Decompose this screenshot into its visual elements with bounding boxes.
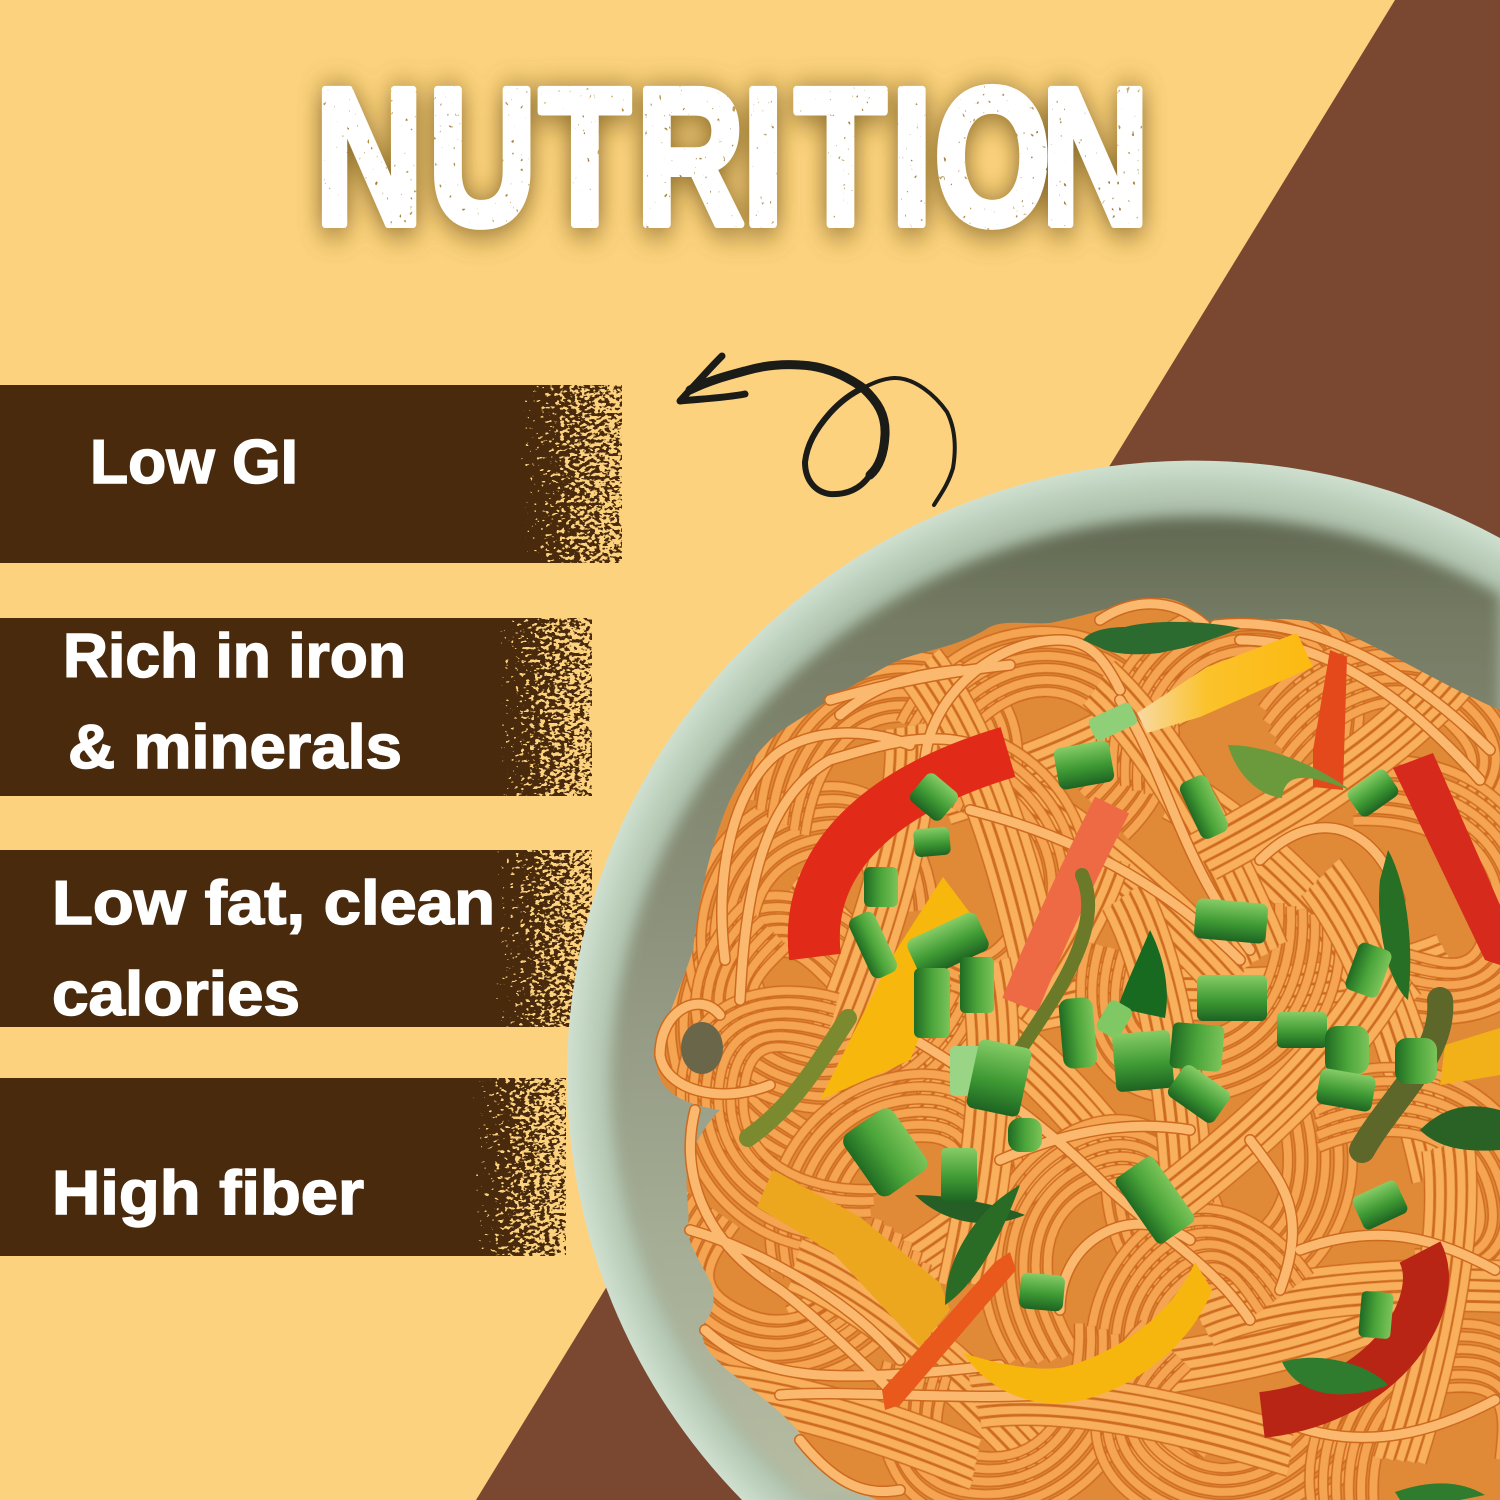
bowl rim: [567, 461, 1500, 1500]
label: Low GI: Low GI: [90, 428, 298, 497]
diagonal brown panel: [476, 0, 1500, 1500]
gap in left noodle loop: [681, 1022, 723, 1074]
noodles: [640, 590, 1500, 1500]
bowl interior: [612, 517, 1500, 1500]
label: and minerals: & minerals: [68, 713, 402, 782]
bar: Low fat, clean calories: [0, 850, 592, 1029]
label: Low fat, clean: Low fat, clean: [52, 869, 495, 938]
bar: Low GI: [0, 385, 622, 563]
loose foreground strands: [660, 604, 1495, 1492]
bowl of noodles: [567, 461, 1500, 1500]
dark leaves: [915, 622, 1500, 1500]
label: Rich in iron: Rich in iron: [63, 622, 406, 691]
green onion pieces: [839, 701, 1437, 1339]
yellow peppers: [757, 633, 1500, 1403]
green chili peppers: [748, 875, 1440, 1150]
title: NUTRITION: [315, 51, 1149, 269]
bar: High fiber: [0, 1078, 566, 1256]
label: calories: calories: [52, 960, 300, 1029]
red and orange peppers: [814, 650, 1500, 1415]
title: NUTRITION: [315, 47, 1149, 265]
arrow: [680, 356, 955, 505]
bar: Rich in iron and minerals: [0, 618, 592, 796]
label: High fiber: High fiber: [52, 1159, 364, 1228]
